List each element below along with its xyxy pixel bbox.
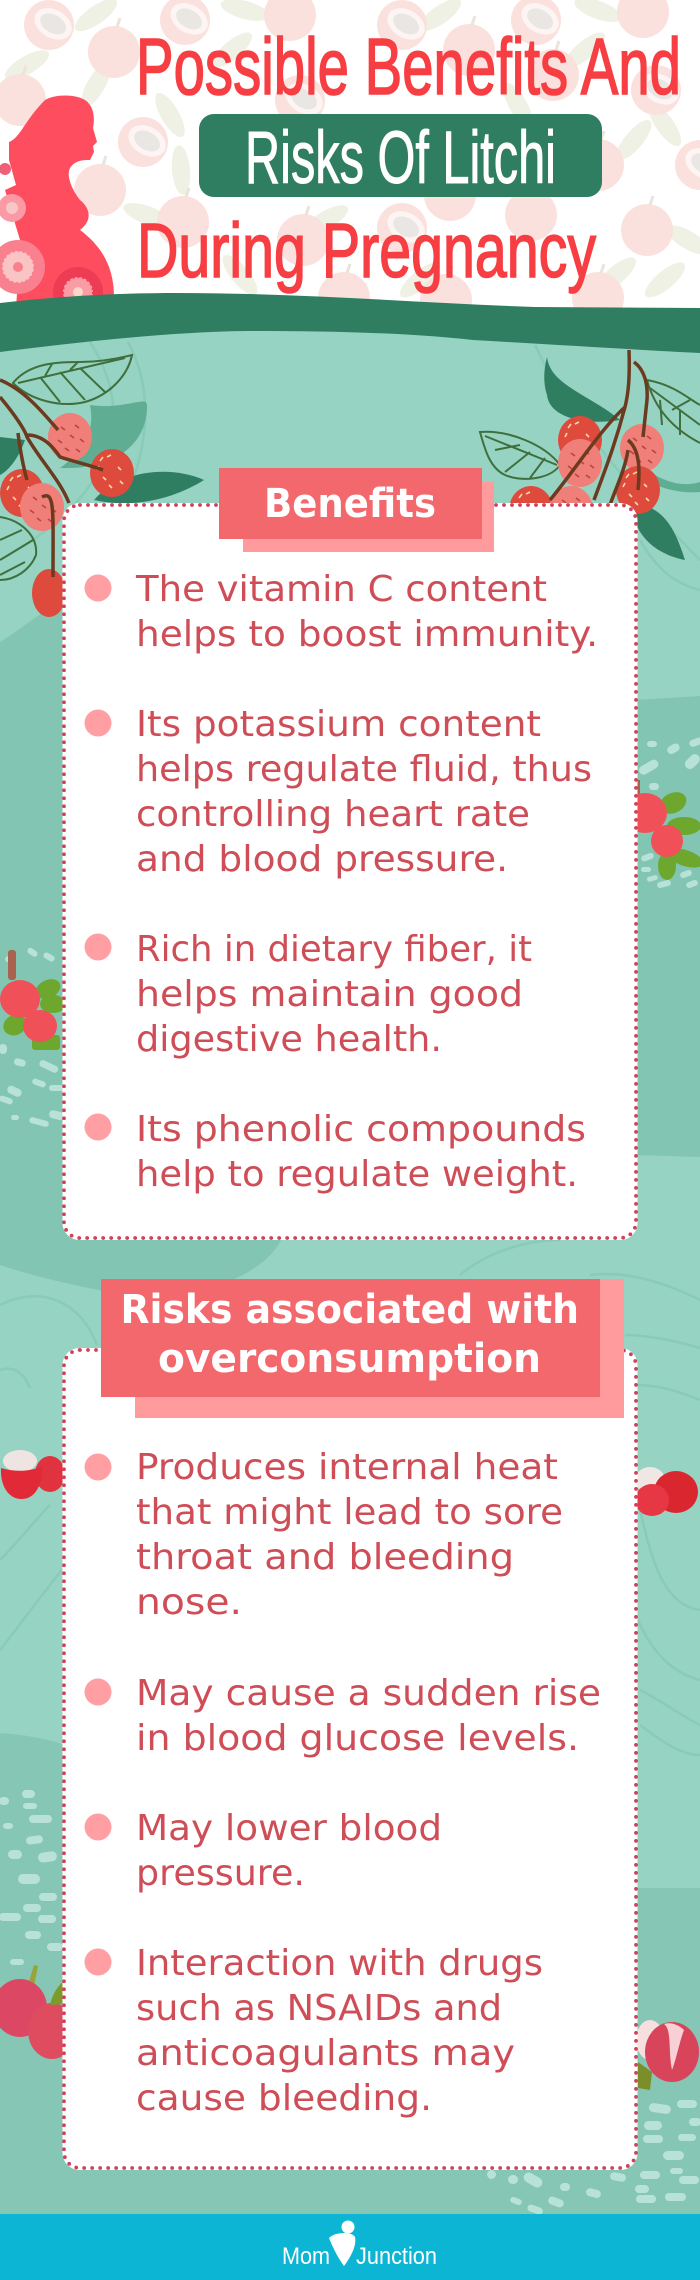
- benefit: vitamin C: The vitamin C content: [135, 569, 547, 610]
- litchi branch: top left: [0, 355, 204, 617]
- litchi branch: top right: [480, 350, 700, 560]
- benefit: vitamin C: [84, 569, 598, 655]
- pregnant woman silhouette with flowers: [0, 96, 114, 317]
- risks heading: [101, 1279, 624, 1418]
- left peeled litchi: [1, 1450, 65, 1499]
- left raspberry litchi cluster with dots: [0, 1791, 76, 2059]
- benefit: vitamin C: helps to boost immunity.: [136, 614, 598, 655]
- risk: blood pressure: pressure.: [136, 1853, 305, 1894]
- benefits heading: Benefits: [264, 481, 436, 527]
- benefit: potassium: [84, 704, 592, 880]
- risk: blood glucose: in blood glucose levels.: [136, 1718, 579, 1759]
- benefit: dietary fiber: [84, 929, 532, 1060]
- footer bar: [0, 2214, 700, 2280]
- right peeled litchi: [635, 1467, 698, 1516]
- benefit: dietary fiber: digestive health.: [136, 1019, 442, 1060]
- MomJunction logo: Junction: [356, 2243, 437, 2270]
- benefit: potassium: and blood pressure.: [136, 839, 508, 880]
- panel: risks: [62, 1279, 638, 2170]
- risk: internal heat: nose.: [136, 1582, 242, 1623]
- benefit: dietary fiber: helps maintain good: [136, 974, 523, 1015]
- risk: internal heat: throat and bleeding: [136, 1537, 514, 1578]
- risk: blood glucose: May cause a sudden rise: [136, 1673, 601, 1714]
- right strawberry cluster with dots: [623, 738, 700, 888]
- risk: blood pressure: [84, 1808, 442, 1894]
- risks heading: overconsumption: [158, 1336, 541, 1382]
- MomJunction logo: Mom: [282, 2243, 330, 2270]
- benefit: potassium: helps regulate fluid, thus: [136, 749, 592, 790]
- risk: drug interaction: cause bleeding.: [136, 2078, 432, 2119]
- title pill: [199, 114, 602, 199]
- risk: blood glucose: [84, 1673, 601, 1759]
- panel: benefits: [62, 468, 638, 1240]
- right open litchi with dots: [488, 2020, 700, 2214]
- MomJunction logo: [282, 2220, 437, 2270]
- header white background with faded litchi pattern: [0, 0, 700, 326]
- risk: drug interaction: such as NSAIDs and: [136, 1988, 502, 2029]
- risk: internal heat: Produces internal heat: [136, 1447, 558, 1488]
- green wave band: [0, 293, 700, 353]
- risk: internal heat: [84, 1447, 563, 1623]
- benefit: potassium: controlling heart rate: [136, 794, 530, 835]
- left strawberry cluster with dots: [0, 948, 66, 1126]
- risk: internal heat: that might lead to sore: [136, 1492, 563, 1533]
- risks heading: Risks associated with: [120, 1287, 579, 1333]
- benefit: phenolic compounds: Its phenolic compounds: [136, 1109, 586, 1150]
- benefits heading: [219, 468, 494, 552]
- risk: drug interaction: [84, 1943, 543, 2119]
- benefit: phenolic compounds: help to regulate weight.: [136, 1154, 578, 1195]
- risk: blood pressure: May lower blood: [136, 1808, 442, 1849]
- risk: drug interaction: Interaction with drugs: [136, 1943, 543, 1984]
- benefit: potassium: Its potassium content: [136, 704, 541, 745]
- benefit: phenolic compounds: [84, 1109, 586, 1195]
- risk: drug interaction: anticoagulants may: [136, 2033, 515, 2074]
- benefit: dietary fiber: Rich in dietary fiber, it: [136, 929, 532, 970]
